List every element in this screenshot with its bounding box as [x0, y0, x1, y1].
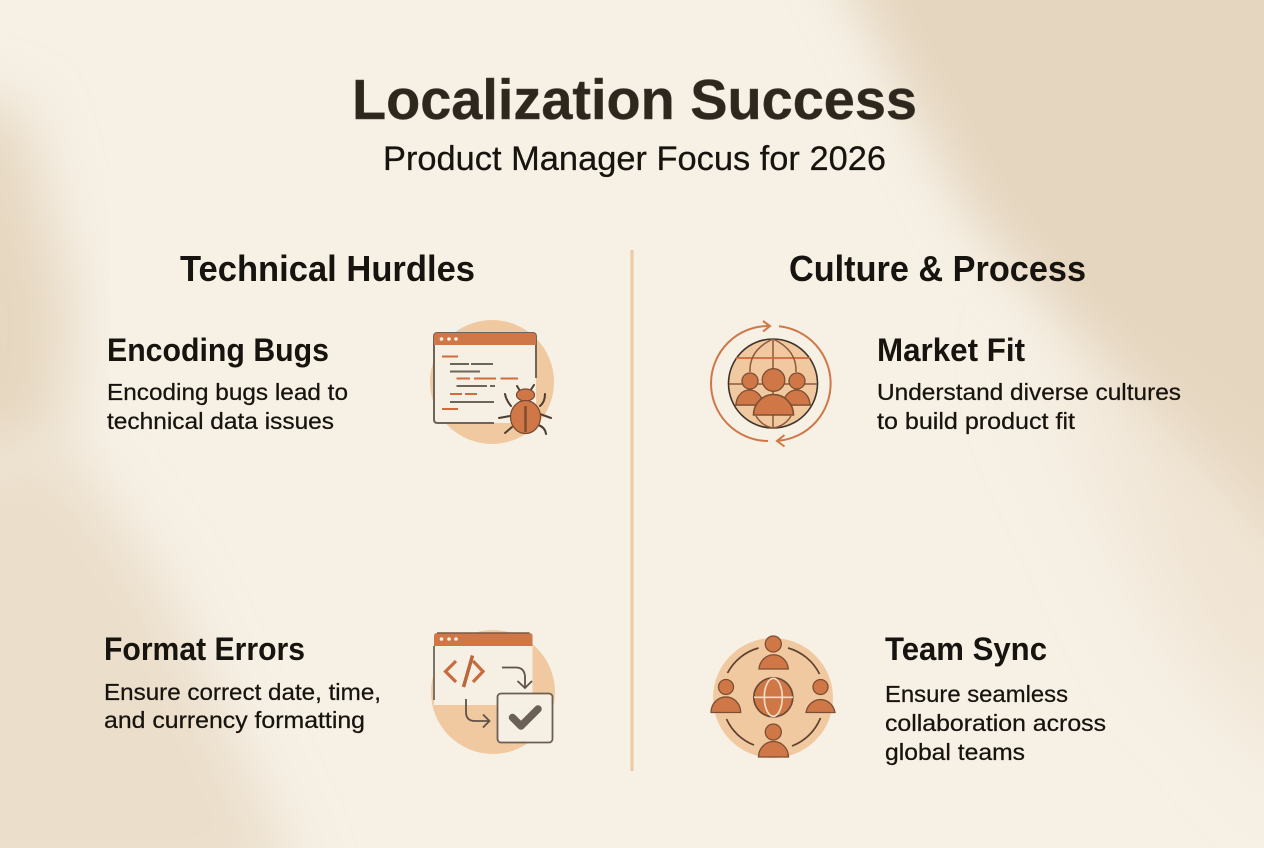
item: encoding bugs — [107, 320, 554, 444]
market fit description: Understand diverse cultures — [877, 379, 1181, 405]
market fit heading: Market Fit — [877, 332, 1025, 368]
encoding bugs description: technical data issues — [107, 408, 334, 434]
icon: code window with checkmark — [431, 630, 555, 754]
team sync heading: Team Sync — [885, 631, 1047, 667]
subtitle: Product Manager Focus for 2026 — [383, 140, 886, 178]
team sync description — [885, 681, 1106, 765]
format errors heading: Format Errors — [104, 631, 305, 667]
encoding bugs description — [107, 379, 348, 434]
team sync description: global teams — [885, 739, 1025, 765]
team sync description: Ensure seamless — [885, 681, 1068, 707]
encoding bugs heading: Encoding Bugs — [107, 332, 329, 368]
format errors description — [104, 679, 381, 733]
market fit description — [877, 379, 1181, 434]
format errors description: Ensure correct date, time, — [104, 679, 381, 705]
item: format errors — [104, 630, 555, 754]
heading: technical hurdles: Technical Hurdles — [180, 248, 475, 289]
format errors description: and currency formatting — [104, 707, 365, 733]
item: team sync — [711, 631, 1106, 765]
title: Localization Success — [352, 68, 917, 132]
center divider — [630, 250, 634, 771]
team sync description: collaboration across — [885, 710, 1106, 736]
icon: globe with people — [711, 321, 831, 446]
icon: code window with bug — [430, 320, 554, 444]
heading: culture and process: Culture & Process — [789, 248, 1086, 289]
item: market fit — [711, 321, 1181, 446]
market fit description: to build product fit — [877, 408, 1076, 434]
panel: technical hurdles — [104, 248, 555, 754]
icon: team around globe — [711, 636, 835, 758]
encoding bugs description: Encoding bugs lead to — [107, 379, 348, 405]
panel: culture and process — [711, 248, 1181, 765]
